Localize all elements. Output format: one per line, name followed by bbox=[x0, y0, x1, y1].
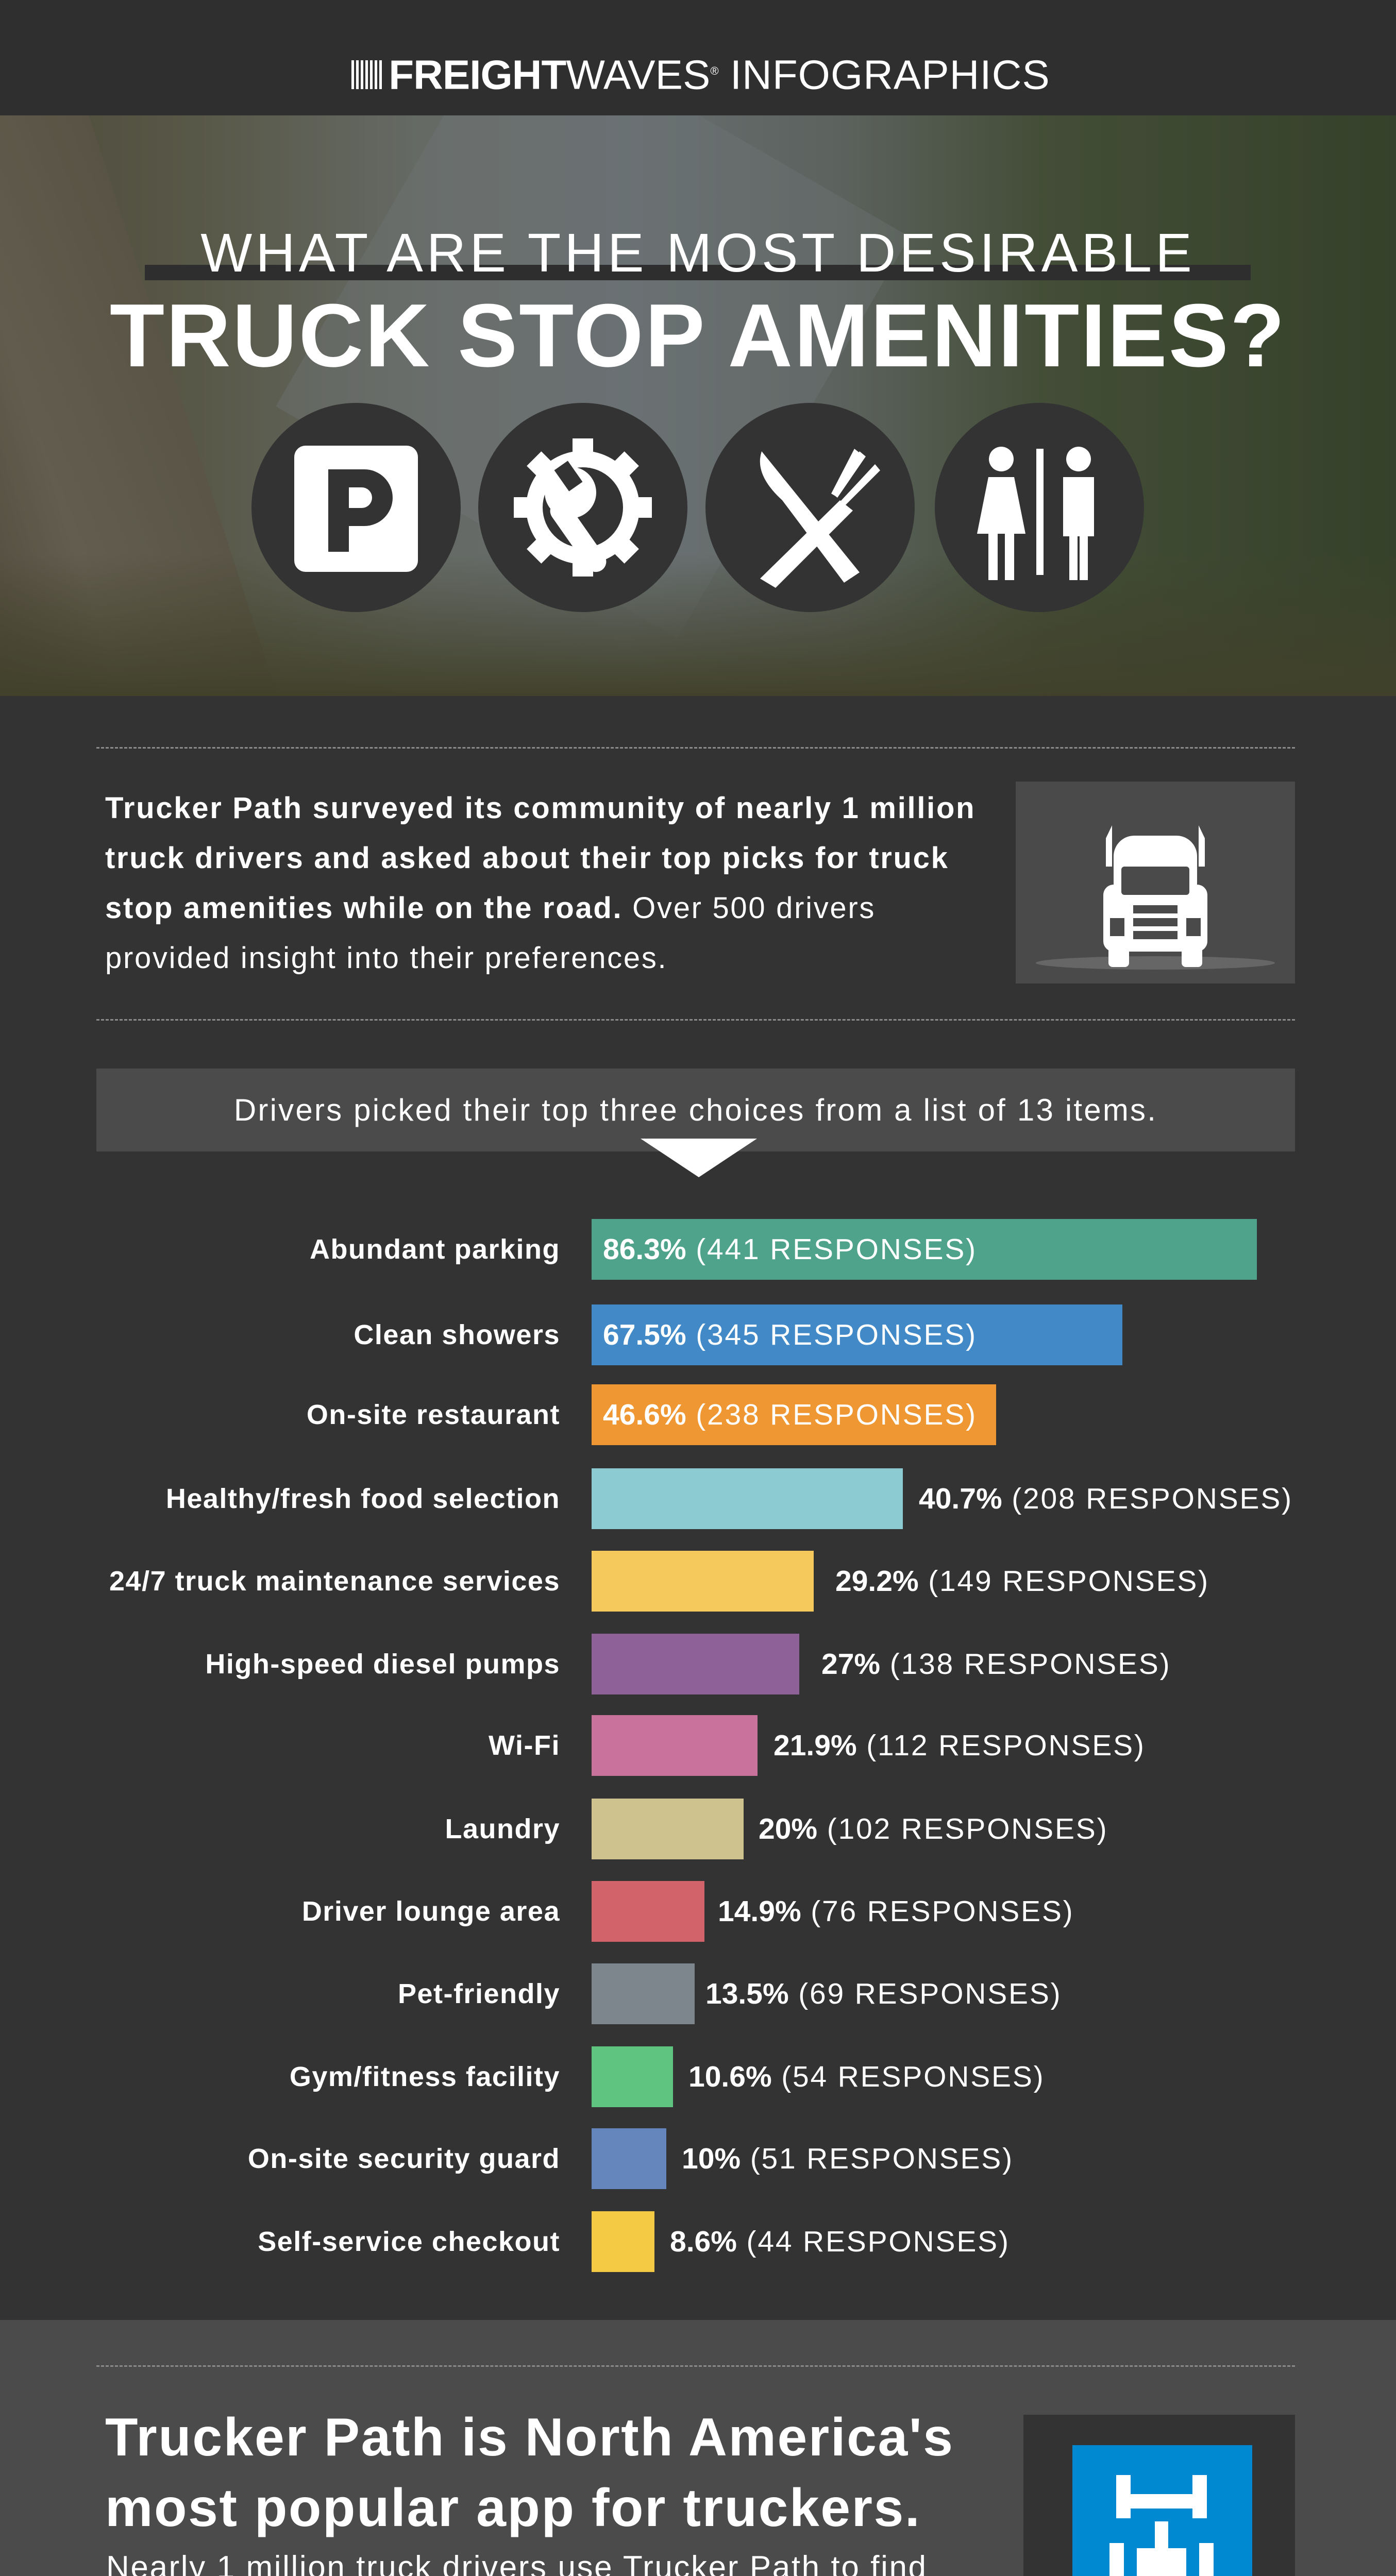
intro text bbox=[105, 791, 975, 975]
row: Wi-Fi: Wi-Fi bbox=[489, 1730, 560, 1761]
arrow: down triangle bbox=[641, 1139, 757, 1177]
divider bbox=[96, 747, 1295, 749]
row: Healthy food: Healthy/fresh food selection bbox=[166, 1483, 560, 1514]
row: Healthy food bbox=[166, 1468, 1293, 1529]
bottom heading: Trucker Path is North America's bbox=[105, 2408, 954, 2467]
row: Gym: Gym/fitness facility bbox=[290, 2061, 560, 2092]
row: Driver lounge: 14.9% (76 RESPONSES) bbox=[718, 1895, 1074, 1928]
intro text: Trucker Path surveyed its community of nearly 1 million bbox=[105, 791, 975, 825]
row: Wi-Fi: 21.9% (112 RESPONSES) bbox=[773, 1729, 1146, 1762]
row: Self-service bbox=[258, 2211, 1010, 2272]
bar chart bbox=[109, 1219, 1293, 2272]
row: maintenance: 24/7 truck maintenance services bbox=[109, 1566, 560, 1597]
icon: maintenance gear wrench bbox=[478, 403, 687, 612]
row: diesel pumps: 27% (138 RESPONSES) bbox=[821, 1648, 1171, 1681]
intro text: stop amenities while on the road. Over 500 drivers bbox=[105, 891, 876, 925]
row: Security bbox=[248, 2128, 1014, 2189]
divider bbox=[96, 1019, 1295, 1021]
banner: subtitle bbox=[96, 1069, 1295, 1151]
row: Clean showers bbox=[354, 1304, 1122, 1365]
row: Wi-Fi bbox=[489, 1715, 1146, 1776]
icon: restroom bbox=[935, 403, 1144, 612]
row: diesel pumps: High-speed diesel pumps bbox=[205, 1649, 560, 1680]
app logo box bbox=[1023, 2415, 1295, 2576]
row: Pet-friendly: Pet-friendly bbox=[398, 1978, 560, 2009]
header bar bbox=[0, 0, 1396, 115]
icon: parking bbox=[251, 403, 461, 612]
row: Abundant parking bbox=[310, 1219, 1257, 1280]
icon: knife and fork bbox=[705, 403, 915, 612]
hero photo section bbox=[0, 115, 1396, 696]
row: maintenance: 29.2% (149 RESPONSES) bbox=[835, 1565, 1209, 1598]
row: Gym: 10.6% (54 RESPONSES) bbox=[688, 2060, 1045, 2093]
bottom heading bbox=[105, 2408, 954, 2538]
row: On-site restaurant: On-site restaurant bbox=[307, 1399, 560, 1430]
row: Laundry: Laundry bbox=[445, 1814, 560, 1844]
bottom heading: most popular app for truckers. bbox=[105, 2478, 921, 2538]
row: maintenance bbox=[109, 1551, 1209, 1612]
row: diesel pumps bbox=[205, 1634, 1171, 1694]
banner: subtitle: Drivers picked their top three choices from a list of 13 items. bbox=[234, 1093, 1157, 1127]
row: Laundry bbox=[445, 1799, 1108, 1859]
row: Driver lounge bbox=[302, 1881, 1074, 1942]
row: Laundry: 20% (102 RESPONSES) bbox=[759, 1812, 1108, 1845]
intro text: provided insight into their preferences. bbox=[105, 941, 667, 975]
row: Security: 10% (51 RESPONSES) bbox=[682, 2142, 1014, 2175]
truck icon box bbox=[1016, 782, 1295, 984]
row: Pet-friendly: 13.5% (69 RESPONSES) bbox=[705, 1977, 1062, 2010]
row: Healthy food: 40.7% (208 RESPONSES) bbox=[919, 1482, 1293, 1515]
row: On-site restaurant: 46.6% (238 RESPONSES) bbox=[603, 1398, 977, 1431]
title line 1: WHAT ARE THE MOST DESIRABLE bbox=[200, 223, 1196, 283]
row: On-site restaurant bbox=[307, 1384, 996, 1445]
row: Abundant parking: Abundant parking bbox=[310, 1234, 560, 1265]
row: Pet-friendly bbox=[398, 1963, 1062, 2024]
row: Clean showers: Clean showers bbox=[354, 1319, 560, 1350]
row: Driver lounge: Driver lounge area bbox=[302, 1896, 560, 1927]
row: Gym bbox=[290, 2046, 1045, 2107]
title line 2: TRUCK STOP AMENITIES? bbox=[110, 285, 1286, 385]
bottom panel bbox=[0, 2320, 1396, 2576]
row: Clean showers: 67.5% (345 RESPONSES) bbox=[603, 1318, 977, 1351]
logo text: FREIGHTWAVES® INFOGRAPHICS bbox=[389, 52, 1050, 98]
row: Security: On-site security guard bbox=[248, 2143, 560, 2174]
row: Self-service: 8.6% (44 RESPONSES) bbox=[670, 2225, 1010, 2258]
intro text: truck drivers and asked about their top picks for truck bbox=[105, 841, 949, 875]
row: Abundant parking: 86.3% (441 RESPONSES) bbox=[603, 1233, 977, 1266]
row: Self-service: Self-service checkout bbox=[258, 2226, 560, 2257]
